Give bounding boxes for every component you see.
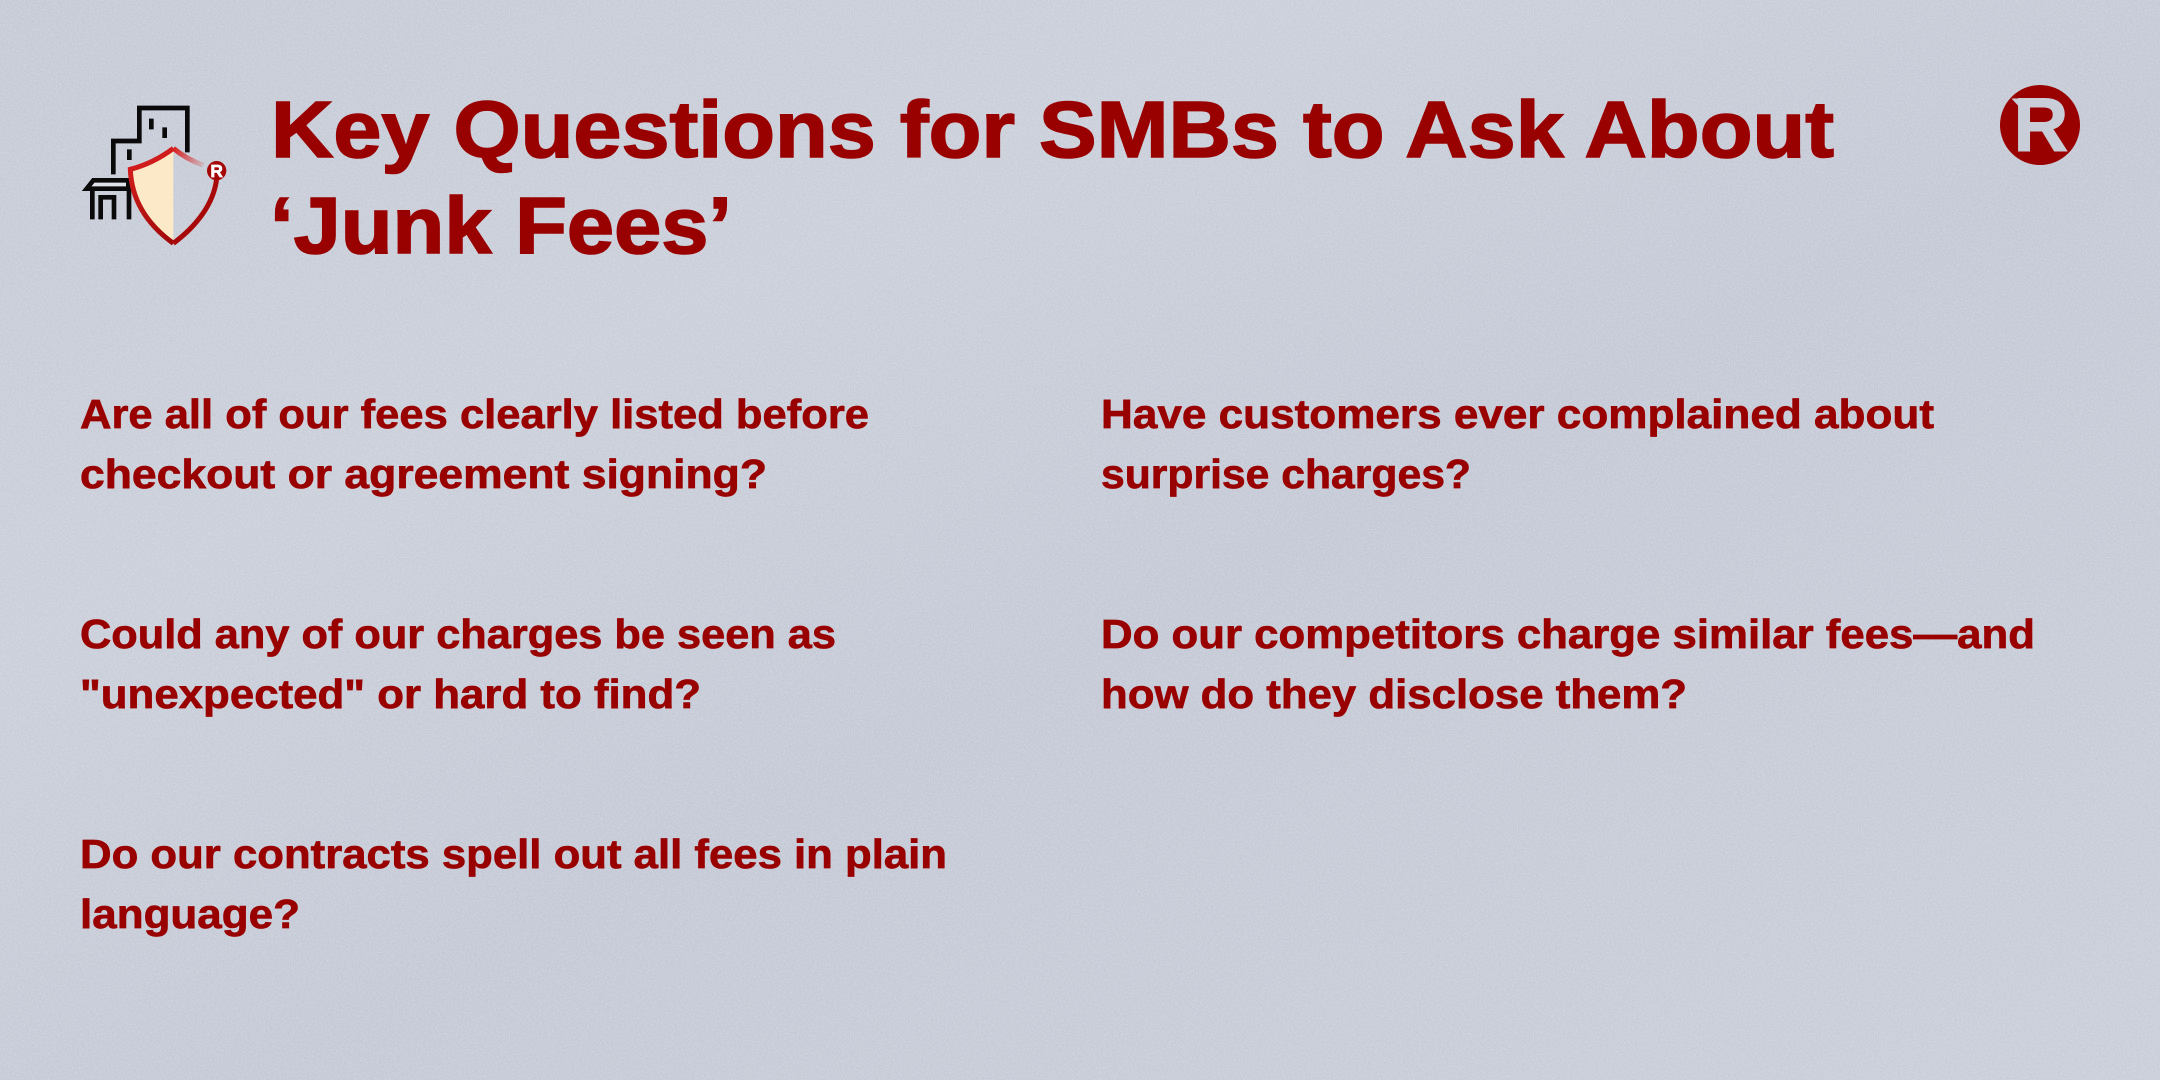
question: customer complaints — [1101, 391, 1934, 497]
question: fees listed: Are all of our fees clearly listed before — [80, 391, 869, 437]
question: competitors: Do our competitors charge similar fees—and — [1101, 611, 2035, 657]
logo — [2000, 83, 2080, 168]
question: contracts — [80, 831, 947, 937]
icon: storefront — [87, 180, 129, 219]
icon: shield — [130, 148, 217, 243]
title: ‘Junk Fees’ — [270, 181, 732, 270]
logo: R — [2014, 83, 2068, 168]
title: Key Questions for SMBs to Ask About — [271, 85, 1834, 174]
question: customer complaints: surprise charges? — [1101, 451, 1471, 497]
icon: registered badge: R — [210, 161, 223, 181]
title — [270, 85, 1834, 270]
question: customer complaints: Have customers ever complained about — [1101, 391, 1934, 437]
question: unexpected charges: "unexpected" or hard to find? — [80, 671, 701, 717]
question: contracts: language? — [80, 891, 300, 937]
question: unexpected charges — [80, 611, 836, 717]
question: competitors — [1101, 611, 2035, 717]
question: unexpected charges: Could any of our charges be seen as — [80, 611, 836, 657]
question: competitors: how do they disclose them? — [1101, 671, 1687, 717]
question: contracts: Do our contracts spell out all fees in plain — [80, 831, 947, 877]
question: fees listed — [80, 391, 869, 497]
question: fees listed: checkout or agreement signing? — [80, 451, 767, 497]
icon: buildings with shield — [87, 108, 226, 243]
icon: office building — [113, 108, 187, 174]
